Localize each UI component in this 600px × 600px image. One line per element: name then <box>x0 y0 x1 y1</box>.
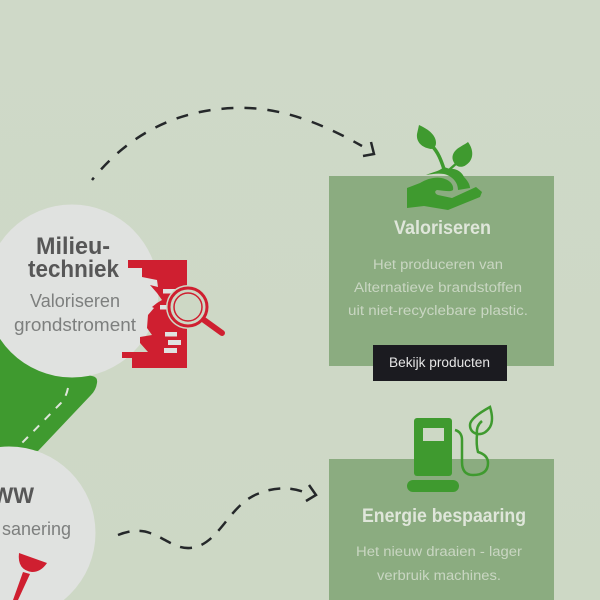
button: Bekijk producten: Bekijk producten <box>389 355 490 370</box>
text: sanering: sanering <box>2 519 71 539</box>
card title: Energie bespaaring <box>362 506 526 527</box>
circle: WW <box>0 446 96 600</box>
circle: Milieutechniek <box>0 204 158 378</box>
icon: hand with seedling <box>407 125 482 210</box>
card description <box>356 544 523 583</box>
heading: Milieutechniek <box>28 233 120 283</box>
card description <box>348 257 528 318</box>
card description: Alternatieve brandstoffen <box>354 280 522 295</box>
green connector band <box>0 335 97 451</box>
card description: uit niet-recyclebare plastic. <box>348 303 528 318</box>
button: Bekijk producten <box>373 345 507 381</box>
icon: red building with magnifier <box>122 260 222 368</box>
arrow: to Valoriseren <box>92 108 374 180</box>
card title: Valoriseren <box>394 218 491 239</box>
icon: red plunger <box>13 553 47 600</box>
card description: Het produceren van <box>373 257 503 272</box>
card description: verbruik machines. <box>377 568 501 583</box>
panel: Valoriseren <box>329 176 554 366</box>
text: Valoriseren grondstroment: Valoriseren <box>30 291 120 311</box>
heading: Milieutechniek: Milieu- <box>36 233 110 260</box>
text: Valoriseren grondstroment <box>14 291 136 335</box>
arrow: to Energie bespaaring <box>118 485 316 548</box>
card description: Het nieuw draaien - lager <box>356 544 523 559</box>
heading: Milieutechniek: techniek <box>28 256 120 283</box>
text: Valoriseren grondstroment: grondstroment <box>14 315 136 335</box>
icon: fuel pump with leaf <box>407 407 492 492</box>
panel: Energie bespaaring <box>329 459 554 600</box>
